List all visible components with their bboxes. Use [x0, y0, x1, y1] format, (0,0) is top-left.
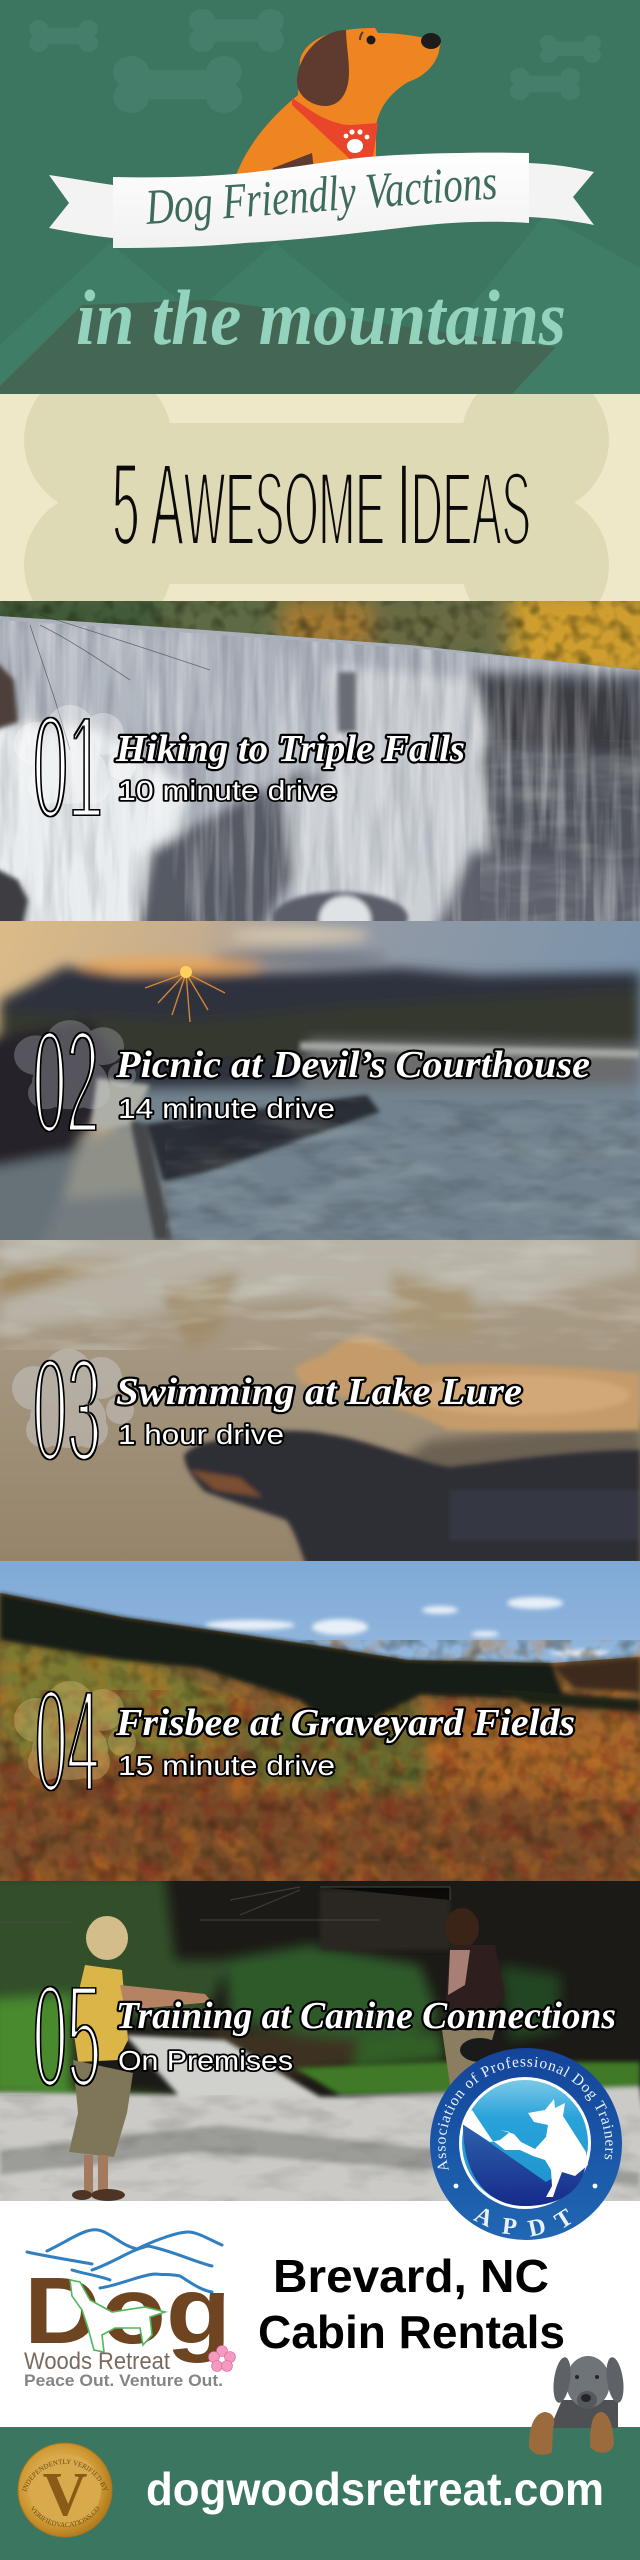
- title 01: Hiking to Triple Falls: [115, 728, 465, 770]
- clouds: [205, 1597, 610, 1656]
- bones pattern: [29, 9, 601, 113]
- rock texture: [165, 1100, 640, 1240]
- V monogram: V: [43, 2461, 88, 2529]
- panel: 5 awesome ideas: [0, 394, 640, 601]
- ribbon banner: [49, 153, 594, 248]
- branches: [30, 615, 210, 750]
- subtitle: in the mountains: in the mountains: [76, 274, 566, 361]
- autumn hillside image: [0, 1593, 640, 1890]
- heading: Brevard, NC: Brevard, NC: [273, 2250, 549, 2302]
- subtitle 04: 15 minute drive: [118, 1750, 335, 1781]
- title 04: Frisbee at Graveyard Fields: [115, 1702, 575, 1744]
- ring letters APDT: [440, 2172, 612, 2235]
- streak texture: [0, 615, 640, 921]
- woman left: [69, 1916, 212, 2201]
- panel: photo 3 swimming dogs: [0, 1230, 640, 1575]
- logo word Dog: Dog: [24, 2258, 231, 2364]
- fence lines: [0, 1887, 450, 1922]
- paw icon 04: [14, 1681, 136, 1780]
- item 05: 05: [33, 1954, 101, 2119]
- paw icon 03: [12, 1349, 134, 1448]
- ribbon title: Dog Friendly Vactions: [143, 153, 499, 235]
- item 01: 01: [33, 685, 103, 850]
- water and dogs image: [0, 1230, 640, 1575]
- item 01: [14, 685, 465, 850]
- dark forest: [0, 1593, 640, 1735]
- badge: APDT: [430, 2048, 622, 2240]
- waterfall image: [0, 640, 640, 921]
- heading: Cabin Rentals: Cabin Rentals: [258, 2306, 565, 2358]
- logo text: Woods Retreat: [24, 2348, 170, 2375]
- rocks: [0, 660, 408, 944]
- icon: dog with bandana: [235, 28, 441, 178]
- item 04: 04: [35, 1659, 99, 1824]
- item 02: 02: [33, 1000, 99, 1165]
- bone background: [24, 394, 609, 601]
- dogs: [184, 1336, 640, 1575]
- mountains: [0, 300, 556, 394]
- footer url: dogwoodsretreat.com: [146, 2463, 604, 2515]
- panel: white brand band: [0, 2201, 640, 2427]
- logo: Dog Woods Retreat: [24, 2230, 236, 2390]
- title 03: Swimming at Lake Lure: [116, 1371, 522, 1413]
- icon: pink flower: [208, 2346, 236, 2372]
- icon: puppy: [529, 2356, 626, 2455]
- subtitle 01: 10 minute drive: [118, 775, 337, 806]
- badge: APDT: APDT: [473, 2208, 572, 2237]
- garden and driveway image: [0, 1875, 560, 2102]
- panel: photo 4 autumn hills: [0, 1561, 640, 1890]
- item 05: [33, 1954, 616, 2119]
- icon: paw on bandana: [344, 129, 369, 153]
- badge: gold medal: [18, 2442, 112, 2538]
- sun: [180, 966, 192, 978]
- overlook image: [0, 927, 640, 1260]
- icon: howling dog outline: [70, 2280, 165, 2352]
- panel: photo 5 training: [0, 1875, 640, 2210]
- foliage texture: [0, 1640, 640, 1881]
- badge: gold medal: VERIFIEDVACATIONS.CO: [32, 2506, 100, 2528]
- subtitle 05: On Premises: [118, 2045, 293, 2076]
- panel: photo 2 overlook: [0, 921, 640, 1260]
- panel: photo 1 waterfall: [0, 590, 640, 944]
- paw icon 02: [14, 1020, 136, 1109]
- ring text: [445, 2066, 605, 2170]
- sunburst: [145, 973, 225, 1022]
- item 03: [12, 1328, 522, 1493]
- panel: header: [0, 0, 640, 394]
- item 02: [14, 1000, 590, 1165]
- shadow texture: [0, 2095, 640, 2201]
- subtitle 03: 1 hour drive: [118, 1419, 284, 1450]
- subtitle 02: 14 minute drive: [118, 1093, 335, 1124]
- badge: gold medal: INDEPENDENTLY VERIFIED BY: [22, 2459, 108, 2492]
- item 03: 03: [33, 1328, 101, 1493]
- dog silhouette: [462, 2099, 588, 2197]
- paw icon 01: [14, 705, 136, 804]
- medal text: [25, 2464, 105, 2496]
- badge: APDT: Association of Professional Dog Trainers: [438, 2056, 614, 2170]
- stone ledge: [90, 1042, 640, 1240]
- panel: green footer: [0, 2427, 640, 2560]
- ripple texture: [0, 1240, 640, 1350]
- title 02: Picnic at Devil’s Courthouse: [115, 1044, 590, 1086]
- item 04: [14, 1659, 575, 1824]
- title 05: Training at Canine Connections: [116, 1995, 616, 2037]
- woman right: [442, 1908, 505, 2085]
- foliage top band: [0, 601, 640, 670]
- icon: blue mountains: [27, 2230, 222, 2292]
- logo tagline: Peace Out. Venture Out.: [24, 2371, 223, 2390]
